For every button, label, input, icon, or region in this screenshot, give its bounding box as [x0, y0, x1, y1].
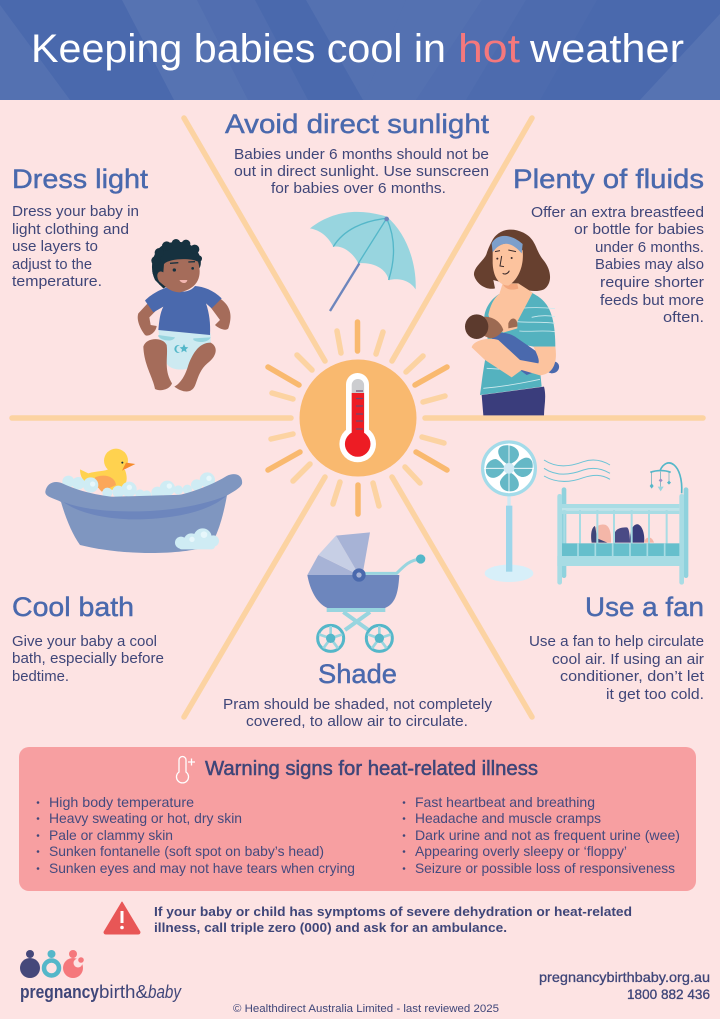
copyright: © Healthdirect Australia Limited - last reviewed 2025 [233, 1003, 499, 1015]
title: weather [529, 27, 684, 71]
list: symptoms left column: Heavy sweating or hot, dry skin [49, 810, 242, 826]
list: symptoms right column: Dark urine and not as frequent urine (wee) [415, 827, 680, 843]
text: use a fan: cool air. If using an air [552, 651, 704, 668]
text: avoid direct sunlight: out in direct sunlight. Use sunscreen [234, 163, 489, 180]
icon: baby bath with duck [45, 449, 242, 553]
list: symptoms right column: Fast heartbeat and breathing [415, 794, 595, 810]
text: cool bath: bath, especially before [12, 650, 164, 667]
icon: warning thermometer [176, 757, 195, 783]
list: symptoms right column: Appearing overly sleepy or ‘floppy’ [415, 843, 627, 859]
contact details: 1800 882 436 [627, 986, 710, 1002]
text: dress light: light clothing and [12, 221, 129, 238]
text: dress light: use layers to [12, 238, 98, 255]
contact details: pregnancybirthbaby.org.au [539, 969, 710, 985]
text: dress light [12, 203, 139, 290]
text: avoid direct sunlight: Babies under 6 months should not be [234, 146, 489, 163]
list: symptoms left column [37, 794, 355, 876]
icon: pram [307, 532, 425, 651]
text: plenty of fluids: feeds but more [600, 292, 704, 309]
list: symptoms right column: Headache and muscle cramps [415, 810, 601, 826]
text: dress light: Dress your baby in [12, 203, 139, 220]
text: plenty of fluids: often. [663, 309, 704, 326]
text: plenty of fluids: Babies may also [595, 256, 704, 273]
sun [300, 360, 416, 476]
heading: shade: Shade [318, 659, 397, 689]
logo: pregnancy birth and baby: birth& [99, 982, 148, 1002]
text: shade: Pram should be shaded, not completely [223, 696, 492, 713]
list: symptoms left column: Sunken eyes and may not have tears when crying [49, 860, 355, 876]
list: symptoms left column: Pale or clammy skin [49, 827, 173, 843]
heading: warning signs: Warning signs for heat-related illness [205, 758, 538, 780]
text: avoid direct sunlight [234, 146, 489, 197]
text: use a fan [529, 633, 705, 703]
sun rays [268, 322, 447, 514]
header banner [0, 0, 720, 100]
text: plenty of fluids: under 6 months. [595, 239, 704, 256]
callout: emergency advice: illness, call triple zero (000) and ask for an ambulance. [154, 920, 507, 935]
icon: pedestal fan [483, 442, 535, 582]
icon: umbrella [310, 212, 416, 311]
text: plenty of fluids: or bottle for babies [574, 221, 704, 238]
text: shade [223, 696, 492, 730]
icon: alert triangle [104, 902, 140, 934]
heading: dress light: Dress light [12, 164, 149, 194]
text: cool bath: Give your baby a cool [12, 633, 157, 650]
heading: plenty of fluids: Plenty of fluids [513, 164, 704, 194]
title: hot [458, 27, 520, 71]
text: avoid direct sunlight: for babies over 6 months. [271, 180, 446, 197]
callout: emergency advice [154, 904, 632, 935]
panel: warning signs [19, 747, 696, 891]
icon: mother breastfeeding [465, 230, 559, 415]
icon: thermometer [339, 373, 376, 462]
icon: baby in nappy [138, 239, 231, 392]
list: symptoms left column: High body temperature [49, 794, 194, 810]
text: cool bath: bedtime. [12, 668, 69, 685]
callout: emergency advice: If your baby or child has symptoms of severe dehydration or heat-related [154, 904, 632, 919]
logo: pregnancy birth and baby: baby [148, 982, 182, 1002]
heading: cool bath: Cool bath [12, 592, 134, 622]
icon: cot with sleeping baby [557, 463, 688, 585]
text: use a fan: Use a fan to help circulate [529, 633, 704, 650]
text: dress light: adjust to the [12, 256, 92, 273]
logo: pregnancy birth and baby [20, 950, 182, 1002]
text: cool bath [12, 633, 164, 685]
text: use a fan: it get too cold. [606, 686, 704, 703]
text: dress light: temperature. [12, 273, 102, 290]
contact details [539, 969, 710, 1002]
list: symptoms right column [403, 794, 680, 876]
heading: use a fan: Use a fan [585, 592, 704, 622]
text: plenty of fluids [531, 204, 704, 326]
title: Keeping babies cool in [31, 27, 446, 71]
title [31, 27, 684, 71]
list: symptoms left column: Sunken fontanelle (soft spot on baby’s head) [49, 843, 324, 859]
text: plenty of fluids: require shorter [600, 274, 704, 291]
list: symptoms right column: Seizure or possible loss of responsiveness [415, 860, 675, 876]
logo: pregnancy birth and baby: pregnancy [20, 982, 99, 1002]
text: plenty of fluids: Offer an extra breastfeed [531, 204, 704, 221]
heading: avoid direct sunlight: Avoid direct sunlight [225, 109, 490, 139]
text: use a fan: conditioner, don’t let [560, 668, 705, 685]
text: shade: covered, to allow air to circulate. [246, 713, 468, 730]
spokes dividing the six tips [12, 118, 703, 717]
icon: wind lines [544, 460, 610, 481]
